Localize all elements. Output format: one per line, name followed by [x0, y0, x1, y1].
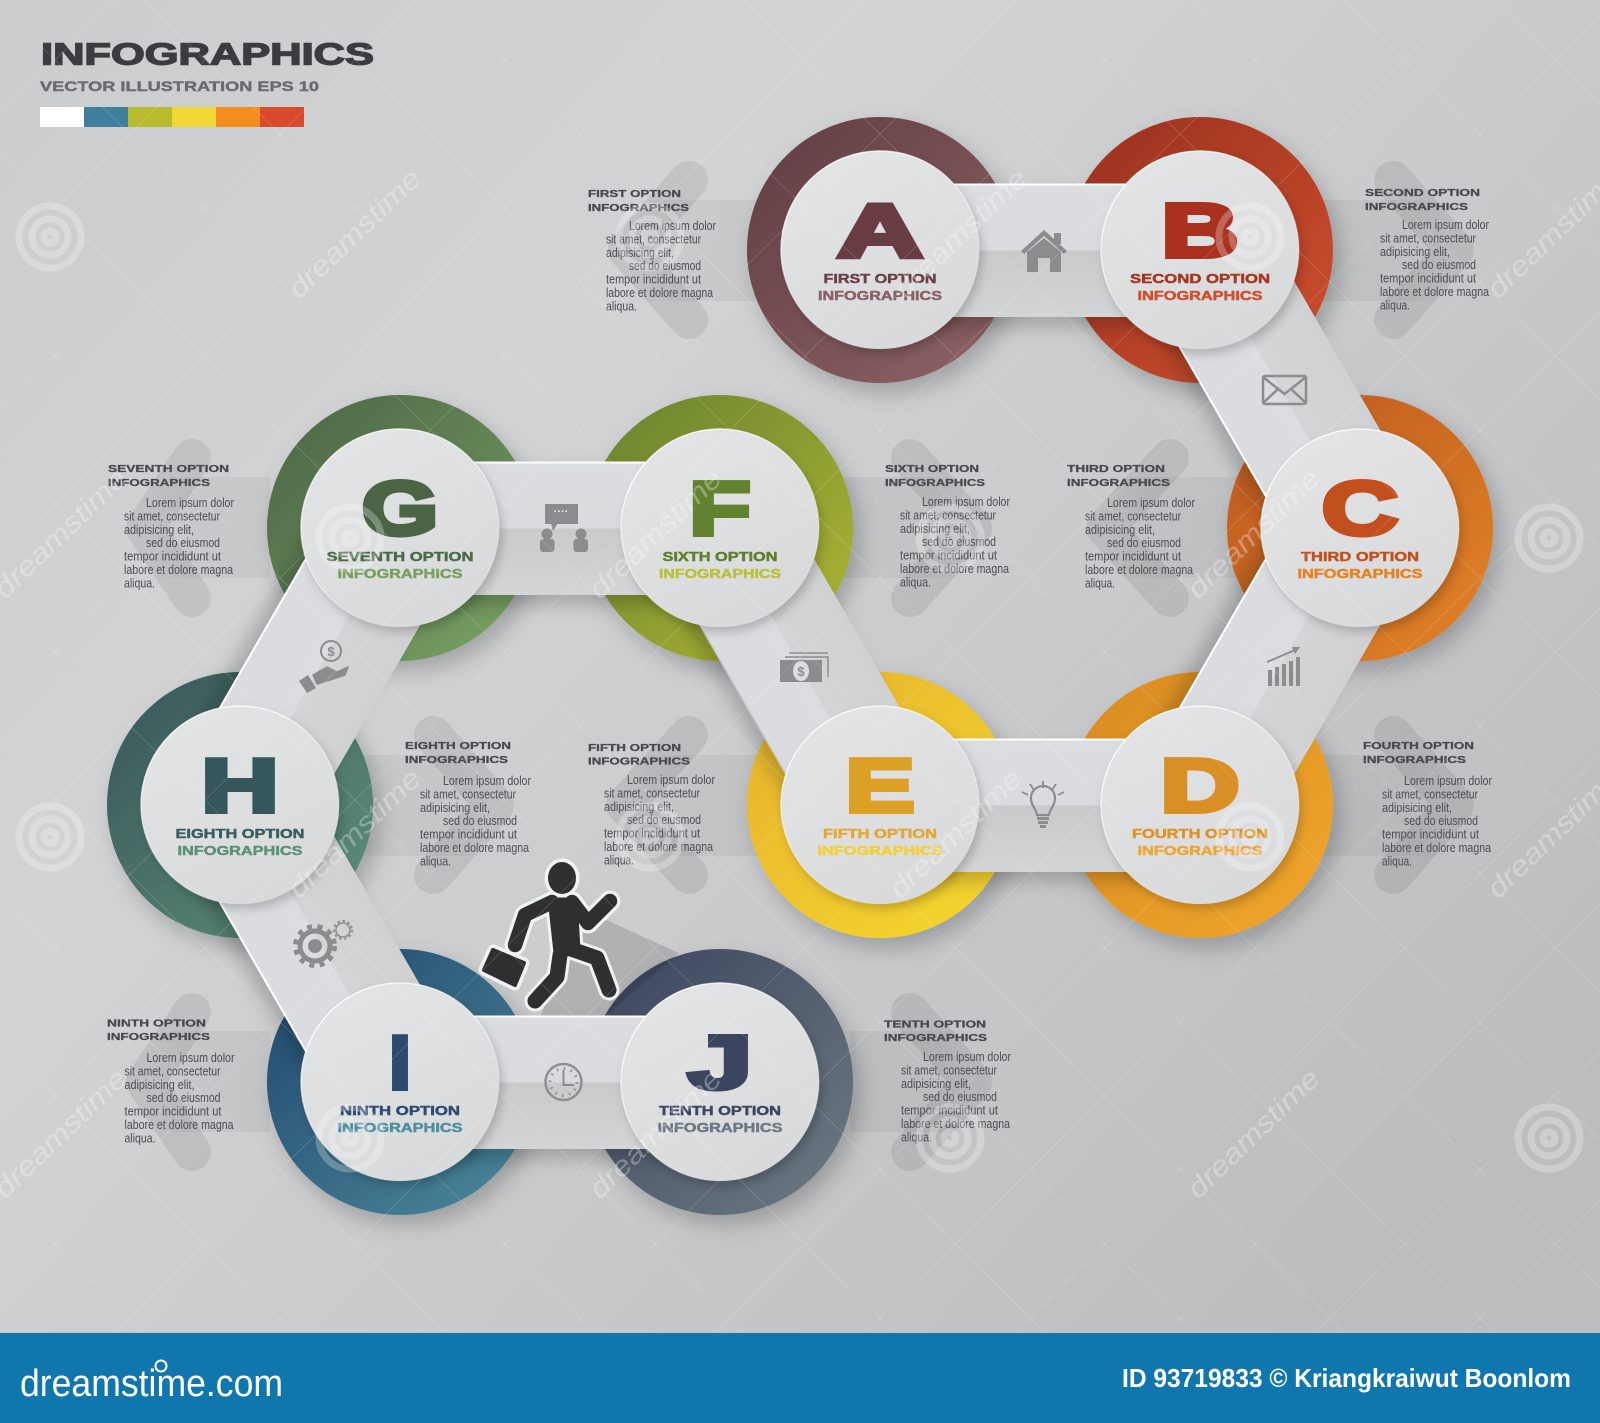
text block: fifth option: FIFTH OPTION — [588, 742, 681, 754]
colour swatches — [40, 107, 304, 127]
ring H — [107, 672, 373, 938]
text block: eighth option: EIGHTH OPTION — [405, 740, 511, 752]
node E: E — [846, 744, 914, 828]
watermark: dreamstime text — [0, 163, 1600, 1204]
text block: sixth option — [885, 463, 1010, 589]
text block: third option: labore et dolore magna — [1085, 563, 1193, 577]
ring F — [587, 395, 853, 661]
text block: fifth option: aliqua. — [604, 853, 634, 867]
text block: ninth option: aliqua. — [124, 1131, 156, 1145]
ring J — [587, 949, 853, 1215]
text block: tenth option: Lorem ipsum dolor — [923, 1050, 1011, 1064]
text block: ninth option: sed do eiusmod — [146, 1091, 221, 1105]
text block: first option — [588, 188, 716, 313]
text block: third option: adipisicing elit, — [1085, 523, 1155, 537]
text block: first option: tempor incididunt ut — [606, 273, 701, 287]
title block — [40, 36, 374, 127]
ring D — [1067, 672, 1333, 938]
icon: people chatting: ···· — [554, 506, 568, 518]
watermark: dreamstime text: dreamstime — [583, 463, 728, 604]
text block: fourth option: labore et dolore magna — [1382, 841, 1491, 855]
icon: hand with coin: $ — [327, 644, 335, 659]
arrow: seventh option — [145, 458, 270, 598]
text block: fourth option — [1363, 740, 1492, 868]
text block: second option: SECOND OPTION — [1365, 187, 1480, 199]
text block: fourth option: adipisicing elit, — [1382, 801, 1452, 815]
node F: F — [690, 466, 750, 550]
text block: eighth option: tempor incididunt ut — [420, 828, 517, 842]
arrow: third option — [1105, 458, 1240, 598]
node G: SEVENTH OPTION — [326, 550, 474, 564]
node E: FIFTH OPTION — [823, 827, 937, 841]
watermark: dreamstime text: dreamstime — [888, 163, 1033, 304]
node D: FOURTH OPTION — [1132, 827, 1268, 841]
node C: THIRD OPTION — [1301, 550, 1419, 564]
runner cast shadow — [540, 910, 679, 1017]
node I — [301, 983, 499, 1181]
text block: second option: tempor incididunt ut — [1380, 272, 1476, 286]
icon: growth chart — [1267, 647, 1300, 686]
text block: second option: adipisicing elit, — [1380, 245, 1450, 259]
text block: seventh option: aliqua. — [124, 576, 155, 590]
text block: ninth option: tempor incididunt ut — [124, 1105, 222, 1119]
node E — [781, 706, 979, 904]
text block: fifth option: tempor incididunt ut — [604, 827, 700, 841]
text block: fifth option: INFOGRAPHICS — [588, 756, 690, 768]
text block: seventh option — [108, 463, 234, 590]
text block: fourth option: Lorem ipsum dolor — [1404, 774, 1492, 788]
text block: third option: sit amet, consectetur — [1085, 509, 1181, 523]
text block: ninth option: INFOGRAPHICS — [107, 1031, 210, 1043]
node D: INFOGRAPHICS — [1138, 844, 1262, 858]
ring E — [747, 672, 1013, 938]
text block: ninth option: sit amet, consectetur — [124, 1064, 220, 1078]
text block: fourth option: aliqua. — [1382, 854, 1412, 868]
node A: A — [838, 188, 922, 272]
text block: fourth option: INFOGRAPHICS — [1363, 754, 1466, 766]
text block: second option: sit amet, consectetur — [1380, 231, 1476, 245]
subtitle: VECTOR ILLUSTRATION EPS 10 — [40, 78, 319, 94]
text block: seventh option: adipisicing elit, — [124, 523, 194, 537]
footer band — [0, 1332, 1600, 1423]
node J: J — [688, 1020, 752, 1104]
text block: tenth option: sit amet, consectetur — [901, 1063, 997, 1077]
runner figure — [484, 862, 610, 1001]
text block: sixth option: Lorem ipsum dolor — [922, 495, 1010, 509]
text block: third option: sed do eiusmod — [1107, 536, 1181, 550]
watermark: dreamstime text: dreamstime — [1181, 463, 1326, 604]
node D: D — [1160, 744, 1240, 828]
text block: third option: tempor incididunt ut — [1085, 550, 1181, 564]
text block: fourth option: sit amet, consectetur — [1382, 787, 1478, 801]
text block: tenth option: adipisicing elit, — [901, 1077, 971, 1091]
text block: fifth option: sit amet, consectetur — [604, 786, 700, 800]
text block: second option: labore et dolore magna — [1380, 285, 1489, 299]
text block: ninth option: adipisicing elit, — [124, 1078, 194, 1092]
text block: fourth option: sed do eiusmod — [1404, 814, 1478, 828]
text block: tenth option: INFOGRAPHICS — [884, 1032, 987, 1044]
text block: fifth option: Lorem ipsum dolor — [627, 773, 715, 787]
text block: second option: Lorem ipsum dolor — [1402, 218, 1489, 232]
text block: fourth option: tempor incididunt ut — [1382, 828, 1479, 842]
node G: G — [362, 466, 438, 550]
text block: third option — [1067, 463, 1195, 590]
text block: sixth option: SIXTH OPTION — [885, 463, 979, 475]
text block: sixth option: sit amet, consectetur — [900, 508, 996, 522]
text block: fourth option: FOURTH OPTION — [1363, 740, 1474, 752]
text block: seventh option: SEVENTH OPTION — [108, 463, 229, 475]
icon: clock — [546, 1064, 582, 1100]
node G: INFOGRAPHICS — [338, 567, 462, 581]
node C: C — [1322, 466, 1398, 550]
text block: sixth option: labore et dolore magna — [900, 562, 1009, 576]
arrow: ninth option — [145, 1012, 270, 1152]
node D — [1101, 706, 1299, 904]
runner outline — [484, 862, 610, 1001]
watermark: dreamstime text: dreamstime — [883, 763, 1028, 904]
text block: ninth option: Lorem ipsum dolor — [146, 1051, 234, 1065]
text block: second option — [1365, 187, 1489, 312]
bar H-I — [183, 772, 457, 1115]
icon: light bulb — [1022, 781, 1064, 828]
text block: sixth option: tempor incididunt ut — [900, 549, 997, 563]
text block: tenth option: aliqua. — [901, 1130, 932, 1144]
text block: second option: INFOGRAPHICS — [1365, 201, 1468, 213]
text block: eighth option: sed do eiusmod — [443, 814, 517, 828]
text block: seventh option: sit amet, consectetur — [124, 509, 220, 523]
node J — [621, 983, 819, 1181]
bar C-D — [1143, 495, 1417, 838]
node H: EIGHTH OPTION — [176, 827, 304, 841]
text block: tenth option — [884, 1018, 1011, 1144]
text block: second option: aliqua. — [1380, 298, 1410, 312]
connector bars — [183, 184, 1417, 1149]
bar I-J — [400, 1016, 720, 1149]
node A: INFOGRAPHICS — [818, 289, 942, 303]
footer credit: ID 93719833 © Kriangkraiwut Boonlom — [1122, 1363, 1571, 1393]
text block: sixth option: INFOGRAPHICS — [885, 477, 985, 489]
node H: H — [202, 744, 278, 828]
watermark: dreamstime text: dreamstime — [583, 1063, 728, 1204]
arrow: sixth option — [840, 458, 973, 598]
text block: eighth option: sit amet, consectetur — [420, 787, 516, 801]
text block: fifth option — [588, 742, 715, 867]
coloured rings — [107, 117, 1493, 1215]
icon: gears — [296, 921, 352, 966]
text block: eighth option: aliqua. — [420, 854, 451, 868]
text block: eighth option — [405, 740, 531, 868]
node C — [1261, 429, 1459, 627]
text block: fifth option: labore et dolore magna — [604, 840, 713, 854]
bar G-H — [183, 495, 457, 838]
text block: first option: sed do eiusmod — [629, 259, 701, 273]
text block: ninth option — [107, 1018, 234, 1145]
node E: INFOGRAPHICS — [818, 844, 942, 858]
arrow: second option — [1320, 180, 1455, 320]
node B: B — [1162, 188, 1238, 272]
arrow: eighth option — [360, 735, 495, 875]
node J: INFOGRAPHICS — [658, 1121, 782, 1135]
node G — [301, 429, 499, 627]
node I: INFOGRAPHICS — [338, 1121, 462, 1135]
watermark: dreamstime text: dreamstime — [1181, 1063, 1326, 1204]
text block: first option: aliqua. — [606, 299, 637, 313]
footer logo: dreamstime.com — [20, 1363, 283, 1405]
text block: seventh option: sed do eiusmod — [146, 536, 220, 550]
node F: INFOGRAPHICS — [659, 567, 781, 581]
arrow: tenth option — [850, 1012, 973, 1152]
text block: second option: sed do eiusmod — [1402, 258, 1476, 272]
node H — [141, 706, 339, 904]
ring A — [747, 117, 1013, 383]
text block: eighth option: adipisicing elit, — [420, 801, 490, 815]
text block: eighth option: Lorem ipsum dolor — [443, 774, 531, 788]
nodes — [141, 151, 1459, 1181]
icon: envelope — [1263, 376, 1306, 404]
text block: first option: Lorem ipsum dolor — [629, 219, 716, 233]
watermark: dreamstime text: dreamstime — [282, 163, 427, 304]
text block: third option: Lorem ipsum dolor — [1107, 496, 1195, 510]
ring G — [267, 395, 533, 661]
text block: tenth option: tempor incididunt ut — [901, 1104, 998, 1118]
node F — [621, 429, 819, 627]
icon: people chatting — [540, 504, 588, 552]
title: INFOGRAPHICS — [41, 36, 374, 72]
text block: fifth option: sed do eiusmod — [627, 813, 701, 827]
text block: eighth option: INFOGRAPHICS — [405, 754, 508, 766]
running businessman — [484, 862, 610, 1001]
text block: first option: labore et dolore magna — [606, 286, 713, 300]
bar E-D — [880, 739, 1200, 872]
text block: first option: sit amet, consectetur — [606, 232, 701, 246]
text block: seventh option: labore et dolore magna — [124, 563, 233, 577]
text block: seventh option: INFOGRAPHICS — [108, 477, 210, 489]
text block: first option: INFOGRAPHICS — [588, 202, 689, 214]
node B: INFOGRAPHICS — [1138, 289, 1262, 303]
text block: fifth option: adipisicing elit, — [604, 800, 674, 814]
node H: INFOGRAPHICS — [178, 844, 302, 858]
text block: eighth option: labore et dolore magna — [420, 841, 529, 855]
text block: third option: THIRD OPTION — [1067, 463, 1165, 475]
text block: tenth option: TENTH OPTION — [884, 1018, 986, 1030]
text block: sixth option: adipisicing elit, — [900, 522, 970, 536]
text block: sixth option: aliqua. — [900, 575, 931, 589]
text block: ninth option: NINTH OPTION — [107, 1018, 206, 1030]
text block: tenth option: sed do eiusmod — [923, 1090, 997, 1104]
icon: banknotes — [780, 653, 828, 682]
node I: NINTH OPTION — [340, 1104, 460, 1118]
bar F-E — [663, 495, 937, 838]
bar A-B — [880, 184, 1200, 317]
node C: INFOGRAPHICS — [1298, 567, 1422, 581]
watermark: dreamstime text: dreamstime — [282, 763, 427, 904]
node J: TENTH OPTION — [659, 1104, 781, 1118]
text block: first option: FIRST OPTION — [588, 188, 681, 200]
text block: tenth option: labore et dolore magna — [901, 1117, 1010, 1131]
icon: house — [1021, 230, 1067, 272]
bar G-F — [400, 462, 720, 595]
icon: banknotes: $ — [797, 664, 805, 679]
text block: third option: aliqua. — [1085, 576, 1115, 590]
node F: SIXTH OPTION — [662, 550, 778, 564]
node I: I — [390, 1020, 410, 1104]
text block: seventh option: tempor incididunt ut — [124, 550, 221, 564]
node A — [781, 151, 979, 349]
arrow: first option — [627, 180, 762, 320]
arrow: fourth option — [1320, 735, 1455, 875]
bar B-C — [1143, 217, 1417, 560]
text block: sixth option: sed do eiusmod — [922, 535, 996, 549]
text block: first option: adipisicing elit, — [606, 246, 674, 260]
arrow: fifth option — [625, 735, 760, 875]
icon: hand with coin — [299, 641, 348, 693]
text block: third option: INFOGRAPHICS — [1067, 477, 1170, 489]
ring B — [1067, 117, 1333, 383]
node A: FIRST OPTION — [824, 272, 936, 286]
node B: SECOND OPTION — [1130, 272, 1270, 286]
ring I — [267, 949, 533, 1215]
text block: ninth option: labore et dolore magna — [124, 1118, 234, 1132]
ring C — [1227, 395, 1493, 661]
text block: seventh option: Lorem ipsum dolor — [146, 496, 234, 510]
watermark: spirals — [19, 206, 1580, 1169]
node B — [1101, 151, 1299, 349]
